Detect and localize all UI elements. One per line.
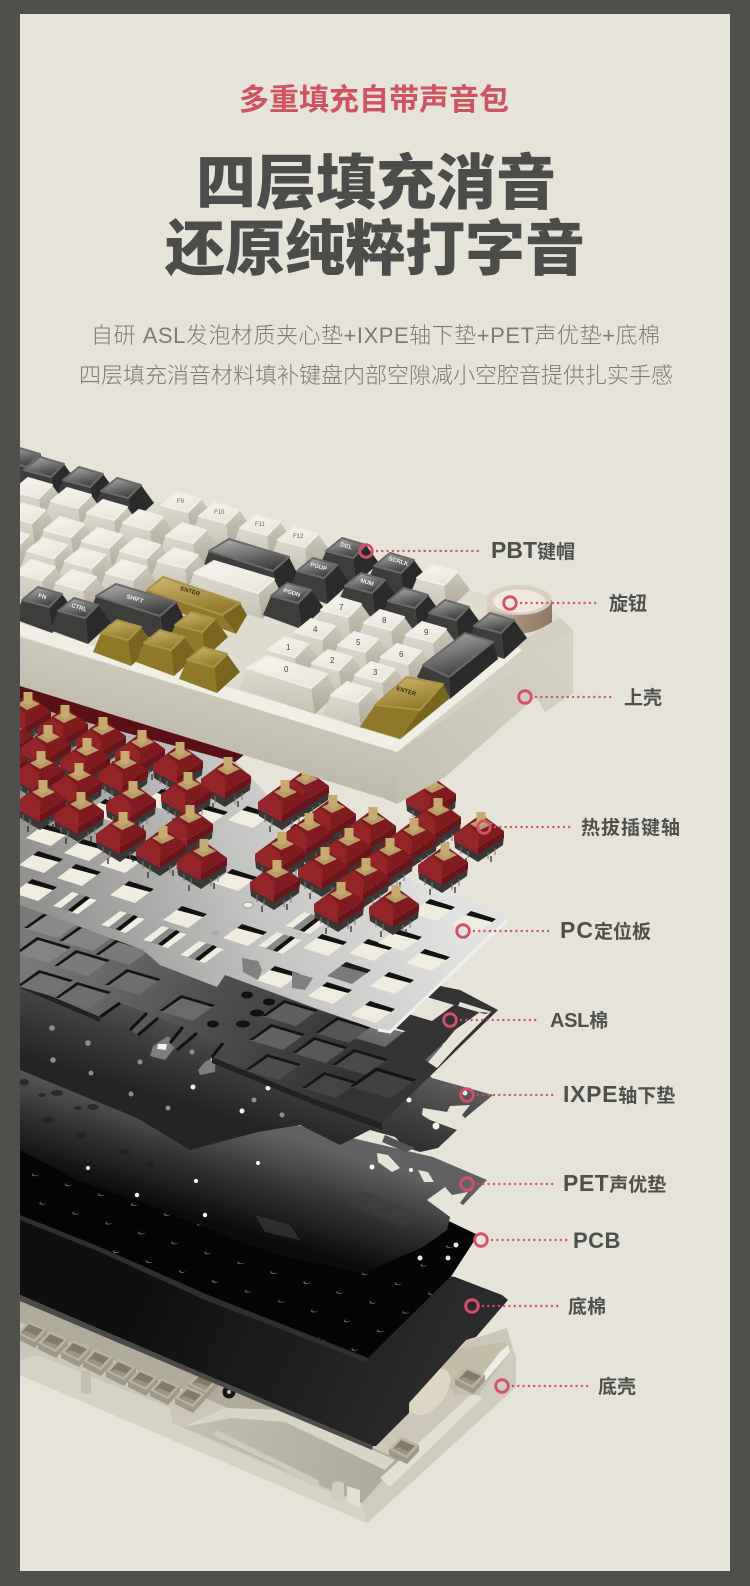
key legends: ENTER [395,686,417,698]
callout: 底棉: 底棉 [568,1295,606,1318]
callout: ASL棉: ASL棉 [550,1010,608,1032]
key legends: 1 [286,643,291,652]
main title [165,150,585,283]
callout: 上壳 [519,687,662,709]
callout: PCB [475,1228,621,1253]
callout: PBT键帽: PBT键帽 [491,537,575,563]
key legends: FN [37,593,47,601]
bottom shell [17,1290,516,1523]
eyebrow heading: 多重填充自带声音包 [239,84,509,117]
key legends: PGUP [309,562,327,573]
description text: 自研 ASL发泡材质夹心垫+IXPE轴下垫+PET声优垫+底棉 [91,323,660,348]
callout: PET声优垫: PET声优垫 [563,1170,666,1196]
key legends: 9 [424,628,429,637]
PET acoustic pad [19,1060,487,1273]
key legends: F11 [255,522,266,528]
callout: IXPE轴下垫: IXPE轴下垫 [563,1081,675,1107]
PC plate [13,680,507,1032]
key legends: DEL [339,542,353,552]
key legends: 5 [356,638,361,647]
callout: PET声优垫 [461,1170,666,1196]
PCB [20,1130,478,1362]
key legends: 8 [382,616,387,625]
callout: PCB: PCB [573,1228,621,1253]
key legends: ENTER [179,586,201,598]
key legends: 4 [313,625,318,634]
callout: PC定位板 [457,917,651,943]
callout: 上壳: 上壳 [624,687,662,709]
callout: 旋钮 [504,593,647,615]
callout: 热拔插键轴: 热拔插键轴 [581,817,681,839]
rotary knob [486,585,552,634]
plus key [417,633,498,699]
callout: 底壳: 底壳 [598,1375,636,1398]
main title: 四层填充消音 [196,150,556,217]
exploded keyboard illustration [0,447,573,1523]
bottom foam [20,1200,508,1450]
top shell [20,470,573,804]
callout: 热拔插键轴 [478,817,681,839]
callout: IXPE轴下垫 [461,1081,675,1107]
IXPE switch pad [20,983,493,1152]
key legends: SCRLK [387,556,410,568]
ASL foam layer [15,900,498,1130]
key legends: 6 [399,650,404,659]
enter key, main block [141,577,247,634]
key legends: NUM [359,578,374,588]
key legends: CTRL [70,603,88,614]
callouts [360,537,681,1398]
callout: ASL棉 [444,1010,608,1032]
description text: 四层填充消音材料填补键盘内部空隙减小空腔音提供扎实手感 [79,363,673,388]
numpad enter key [360,677,450,739]
description text [79,323,673,388]
main title: 还原纯粹打字音 [165,216,585,283]
key legends: 0 [284,665,289,674]
key legends: PGDN [282,588,301,599]
key legends: SHIFT [125,594,144,605]
key legends: 3 [373,668,378,677]
callout: 旋钮: 旋钮 [609,593,647,615]
callout: PBT键帽 [360,537,575,563]
key switches [0,676,504,937]
key legends [37,499,429,698]
PBT keycaps [0,447,527,739]
key legends: F9 [177,499,185,505]
key legends: 7 [339,603,344,612]
callout: PC定位板: PC定位板 [560,917,651,943]
callout: 底壳 [496,1375,636,1398]
callout: 底棉 [466,1295,606,1318]
key legends: F12 [293,534,304,540]
key legends: 2 [330,656,335,665]
key legends: F10 [214,510,225,516]
